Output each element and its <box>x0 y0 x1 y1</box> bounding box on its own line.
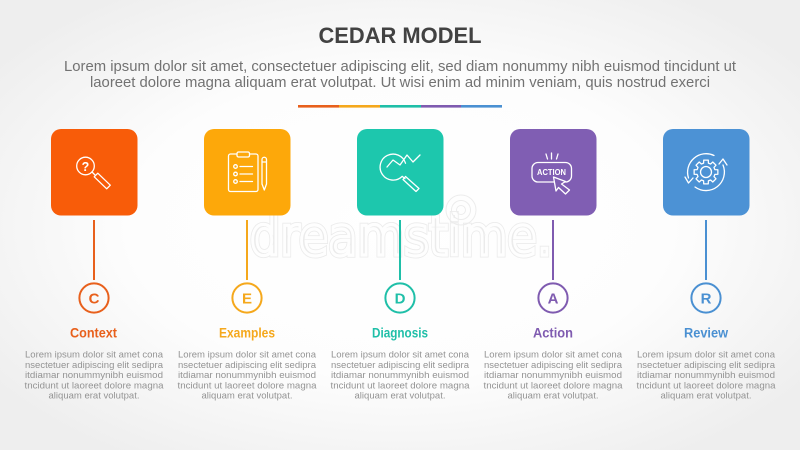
examples description: aliquam erat volutpat. <box>202 390 292 400</box>
examples description: nsectetuer adipiscing elit sedipra <box>178 360 316 370</box>
diagnosis description <box>330 350 470 400</box>
action letter badge: A <box>548 290 559 308</box>
diagnosis description: aliquam erat volutpat. <box>354 390 446 400</box>
review letter badge: R <box>701 290 712 308</box>
panel: examples <box>178 129 316 400</box>
icon: clipboard and pencil <box>228 152 266 192</box>
diagnosis description: itdiamar nonummynibh euismod <box>331 370 469 380</box>
examples description: Lorem ipsum dolor sit amet cona <box>178 350 316 360</box>
icon: gear with cycle arrows <box>685 154 727 191</box>
examples description <box>178 350 316 400</box>
action description: Lorem ipsum dolor sit amet cona <box>484 350 622 360</box>
action description: aliquam erat volutpat. <box>508 390 598 400</box>
watermark: dreamstime. <box>250 205 552 268</box>
panel: action <box>484 129 622 400</box>
examples letter badge <box>232 283 262 313</box>
diagnosis description: tncidunt ut laoreet dolore magna <box>330 380 470 390</box>
examples label: Examples <box>219 326 275 340</box>
panel: review <box>636 129 776 400</box>
diagnosis connector <box>399 220 401 280</box>
panel: context <box>24 129 164 400</box>
title: CEDAR MODEL <box>318 23 482 48</box>
action description: tncidunt ut laoreet dolore magna <box>484 380 622 390</box>
intro text: laoreet dolore magna aliquam erat volutpat. Ut wisi enim ad minim veniam, quis nostrud exerci <box>90 75 710 91</box>
context description: aliquam erat volutpat. <box>48 390 140 400</box>
action description: itdiamar nonummynibh euismod <box>484 370 622 380</box>
action letter badge <box>538 283 568 313</box>
context description <box>24 350 164 400</box>
icon: action button with cursor: ACTION <box>537 167 566 177</box>
diagnosis letter badge <box>385 283 415 313</box>
intro text: Lorem ipsum dolor sit amet, consectetuer adipiscing elit, sed diam nonummy nibh euismod tincidunt ut <box>64 59 736 75</box>
diagnosis letter badge: D <box>395 290 406 308</box>
panel: diagnosis <box>330 129 470 400</box>
action label: Action <box>533 326 573 340</box>
examples letter badge: E <box>242 290 252 308</box>
diagnosis square <box>357 129 444 216</box>
context description: Lorem ipsum dolor sit amet cona <box>25 350 163 360</box>
review description: Lorem ipsum dolor sit amet cona <box>637 350 775 360</box>
review description: nsectetuer adipiscing elit sedipra <box>637 360 775 370</box>
context letter badge <box>79 283 109 313</box>
context description: tncidunt ut laoreet dolore magna <box>24 380 164 390</box>
action connector <box>552 220 554 280</box>
examples square <box>204 129 290 216</box>
action square <box>510 129 596 216</box>
icon: magnifier with question mark <box>77 157 110 189</box>
review letter badge <box>691 283 721 313</box>
context description: itdiamar nonummynibh euismod <box>25 370 163 380</box>
action description: nsectetuer adipiscing elit sedipra <box>484 360 622 370</box>
intro text <box>64 59 736 91</box>
context connector <box>93 220 95 280</box>
examples description: tncidunt ut laoreet dolore magna <box>178 380 316 390</box>
review description: itdiamar nonummynibh euismod <box>637 370 775 380</box>
review label: Review <box>684 326 728 340</box>
examples connector <box>246 220 248 280</box>
watermark: dreamstime. <box>250 205 552 268</box>
context square <box>51 129 138 216</box>
diagnosis description: nsectetuer adipiscing elit sedipra <box>331 360 469 370</box>
action description <box>484 350 622 400</box>
diagnosis description: Lorem ipsum dolor sit amet cona <box>331 350 469 360</box>
context description: nsectetuer adipiscing elit sedipra <box>25 360 163 370</box>
colour divider bar <box>298 105 502 108</box>
context label: Context <box>70 326 117 340</box>
review description: aliquam erat volutpat. <box>660 390 752 400</box>
examples description: itdiamar nonummynibh euismod <box>178 370 316 380</box>
review description <box>636 350 776 400</box>
icon: action button with cursor <box>532 153 572 194</box>
review square <box>663 129 750 216</box>
icon: magnifier with trend line <box>380 154 420 192</box>
diagnosis label: Diagnosis <box>372 326 428 340</box>
review description: tncidunt ut laoreet dolore magna <box>636 380 776 390</box>
context letter badge: C <box>89 290 100 308</box>
icon: magnifier with question mark: ? <box>82 160 89 174</box>
review connector <box>705 220 707 280</box>
